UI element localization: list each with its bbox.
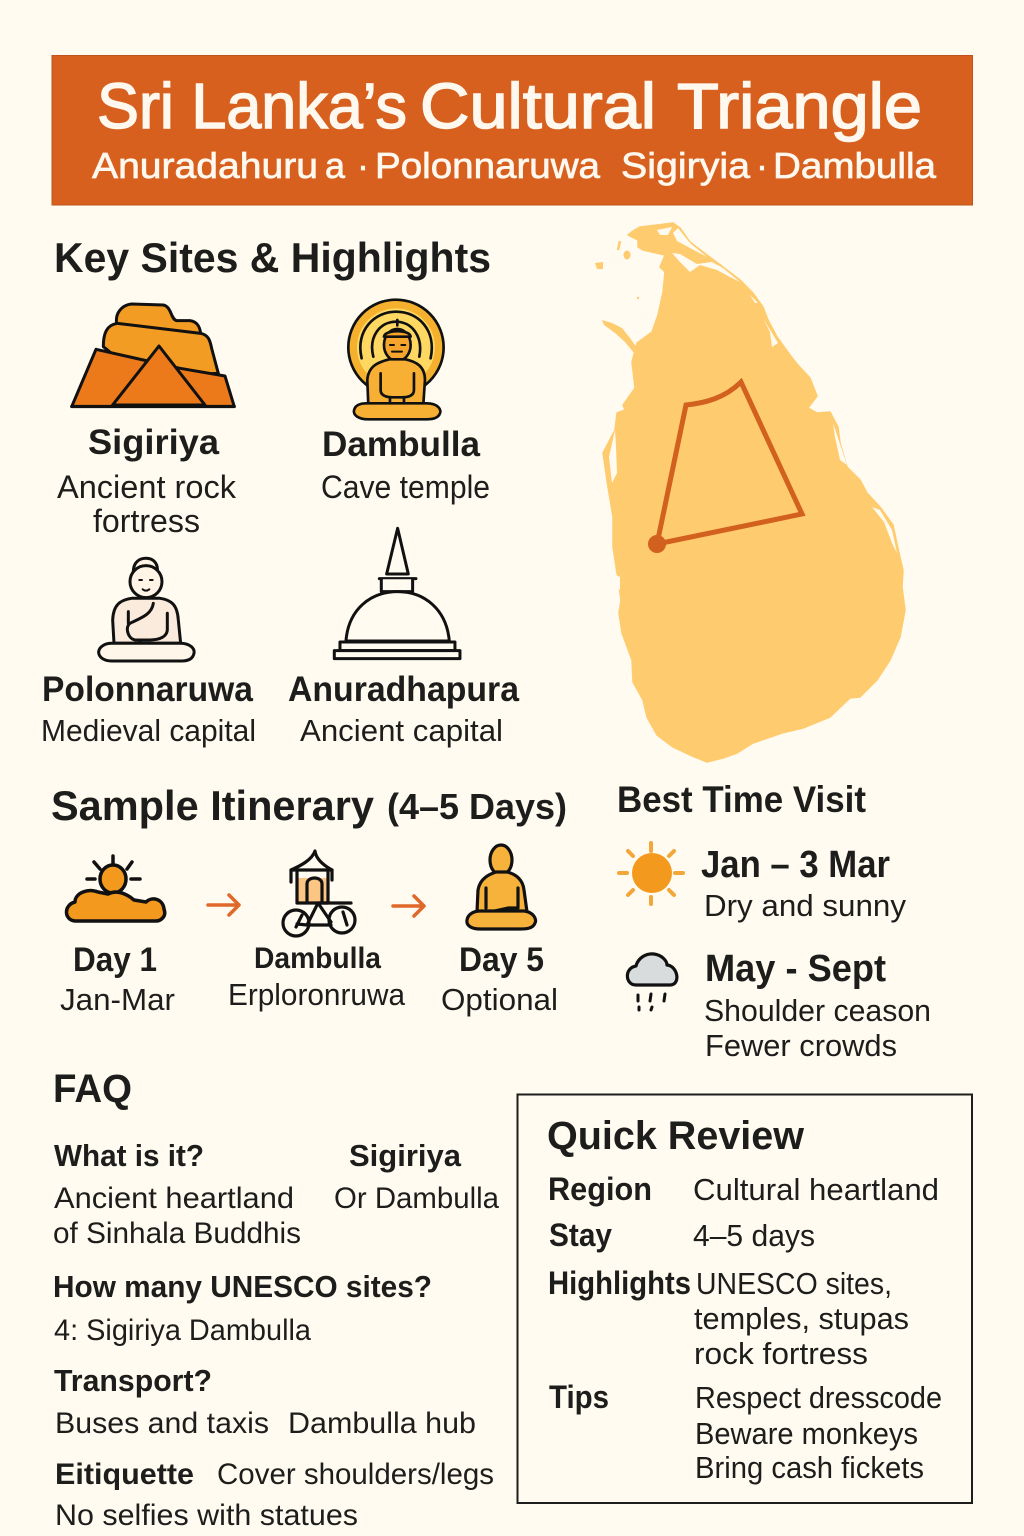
note: day 5: Optional [441,982,558,1017]
arrow: day 1 to Dambulla [208,895,239,915]
panel: quick review [518,1094,972,1503]
row value: cash: Bring cash fickets [695,1450,924,1485]
map marker [648,535,666,553]
row value: temples: temples, stupas [694,1301,909,1336]
subtitle: Anuradahuru [92,145,318,186]
label: shoulder months: May - Sept [705,948,886,990]
title: Triangle [677,70,922,142]
panel: sample itinerary [51,782,567,1017]
description: Anuradhapura: Ancient capital [300,713,503,748]
answer: Sinhala Buddhism: of Sinhala Buddhis [53,1217,301,1250]
label: Anuradhapura: Anuradhapura [288,670,520,709]
heading: key sites: Key Sites & Highlights [54,234,491,281]
description: Polonnaruwa: Medieval capital [41,713,256,748]
row label: stay: Stay [549,1217,612,1253]
label: Sigiriya: Sigiriya [88,423,220,462]
row value: dresscode: Respect dresscode [695,1380,942,1415]
question: Sigiriya: Sigiriya [349,1138,462,1173]
icon: Anuradhapura stupa [334,528,460,659]
row label: region: Region [548,1171,652,1207]
panel: FAQ [53,1067,499,1532]
answer: buses: Buses and taxis [55,1407,269,1440]
subtitle [92,145,937,186]
subtitle: Polonnaruwa [375,145,601,186]
icon: Polonnaruwa seated Buddha [99,558,194,661]
icon: sun over hills [66,856,165,921]
question: what is it: What is it? [54,1138,204,1173]
title: Cultural [420,70,656,142]
row value: region: Cultural heartland [693,1172,939,1207]
label: Dambulla: Dambulla [322,425,481,464]
row label: tips: Tips [549,1379,609,1415]
icon: sun [619,843,683,904]
title banner [52,56,972,205]
icon: meditating figure [467,845,536,929]
question: etiquette: Eitiquette [55,1458,194,1491]
heading: best time: Best Time Visit [617,779,866,820]
heading: quick review: Quick Review [547,1114,805,1158]
note: dry and sunny: Dry and sunny [704,888,906,923]
icon: Dambulla golden Buddha [348,300,444,419]
heading: sample itinerary: (4–5 Days) [387,786,567,827]
triangle route [657,382,802,544]
answer: hub: Dambulla hub [288,1407,476,1440]
label: day 5: Day 5 [459,941,544,979]
subtitle: Dambulla [773,145,937,186]
subtitle: · [756,145,768,186]
description: Dambulla: Cave temple [321,469,490,505]
title: Sri Lanka’s [97,70,407,142]
subtitle: a [325,145,346,186]
row value: monkeys: Beware monkeys [695,1416,918,1451]
row value: stay: 4–5 days [693,1218,815,1253]
label: Dambulla stop: Dambulla [254,942,381,975]
heading: sample itinerary: Sample Itinerary [51,782,375,829]
panel: best time to visit [617,779,931,1063]
question: UNESCO sites: How many UNESCO sites? [53,1269,432,1304]
icon: rickshaw [283,851,355,936]
answer: cover: Cover shoulders/legs [217,1458,494,1491]
note: Dambulla stop: Erploronruwa [228,977,406,1012]
heading: sample itinerary [51,782,567,829]
label: Polonnaruwa: Polonnaruwa [42,670,254,709]
label: dry season months: Jan – 3 Mar [701,844,890,886]
description: Sigiriya: Ancient rock [57,469,237,505]
question: transport: Transport? [54,1363,212,1398]
subtitle: · [357,145,369,186]
arrow: Dambulla to day 5 [393,896,424,916]
icon: Sigiriya rock [72,304,234,407]
answer: UNESCO sites: 4: Sigiriya Dambulla [54,1314,311,1347]
answer: selfies: No selfies with statues [55,1499,358,1532]
heading: FAQ: FAQ [53,1067,132,1111]
answer: Or Dambulla: Or Dambulla [334,1182,499,1215]
row value: fortress: rock fortress [694,1336,868,1371]
note: day 1: Jan-Mar [60,982,175,1017]
answer: heartland: Ancient heartland [54,1182,294,1215]
note: shoulder season: Shoulder ceason [704,993,931,1028]
icon: rain cloud [627,954,677,1010]
subtitle: Sigiryia [621,145,751,186]
description: Sigiriya line 2: fortress [93,503,200,539]
row label: highlights: Highlights [548,1265,691,1301]
panel: key sites and highlights [41,234,520,748]
map of Sri Lanka [595,223,905,762]
note: fewer crowds: Fewer crowds [705,1028,897,1063]
row value: UNESCO: UNESCO sites, [696,1266,892,1301]
title [97,70,922,142]
label: day 1: Day 1 [73,941,157,979]
